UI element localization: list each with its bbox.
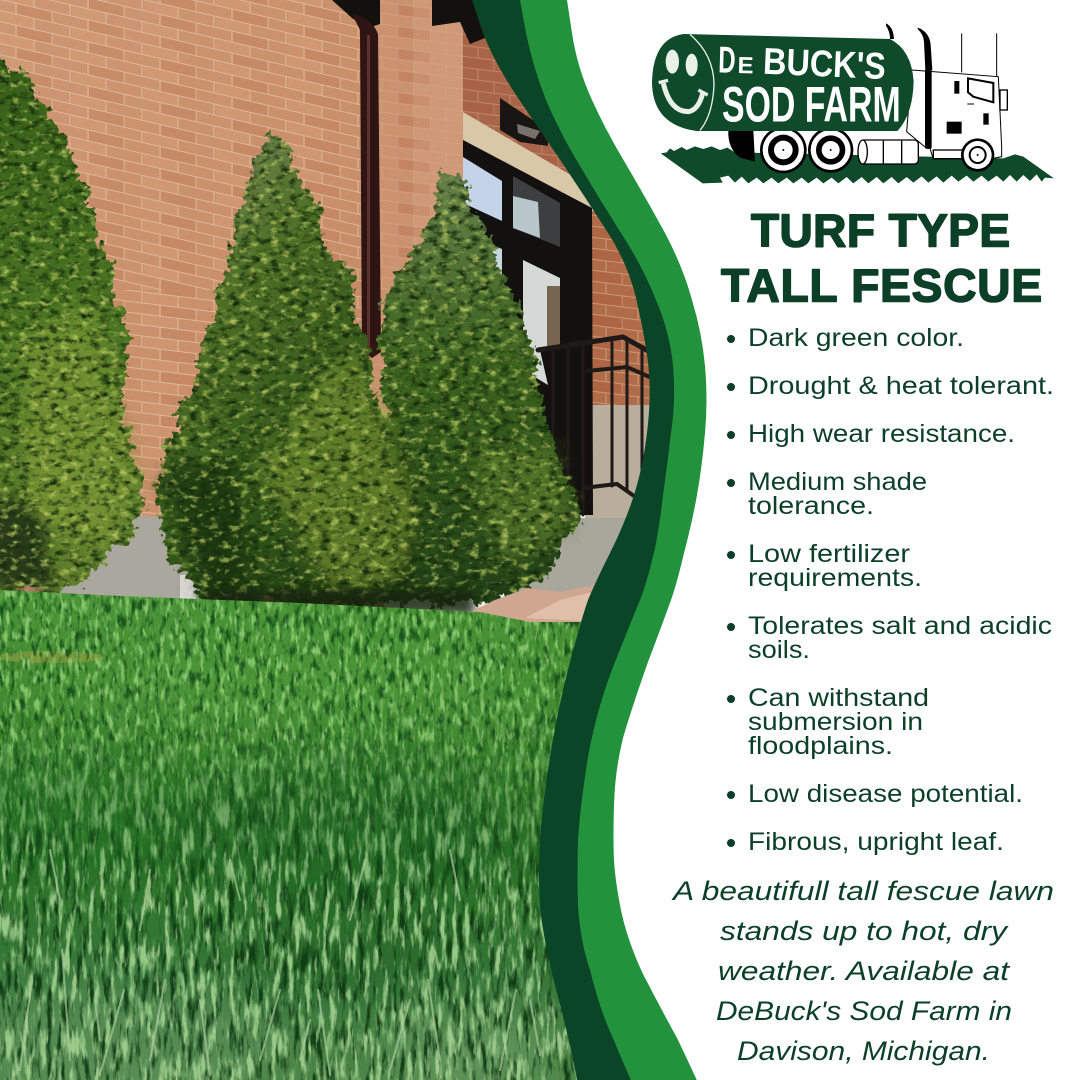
- logo wordmark: [718, 38, 901, 133]
- bullet list of fescue traits: soils.: [748, 636, 810, 664]
- bullet list of fescue traits: floodplains.: [748, 732, 893, 760]
- closing italic paragraph: DeBuck's Sod Farm in: [716, 996, 1012, 1026]
- wall lamp: [500, 98, 548, 146]
- closing italic paragraph: Davison, Michigan.: [737, 1036, 990, 1066]
- bullet list of fescue traits: Medium shade: [748, 468, 927, 496]
- upper dark brick wall: [463, 20, 583, 210]
- lawn: [0, 585, 620, 1080]
- stone band: [463, 112, 600, 215]
- bullet markers: [727, 335, 735, 847]
- brick pillar: [372, 0, 463, 460]
- logo grass: [661, 146, 1054, 183]
- ground shadow under trees: [205, 590, 475, 616]
- bullet list of fescue traits: Tolerates salt and acidic: [748, 612, 1052, 640]
- bullet list of fescue traits: requirements.: [748, 564, 922, 592]
- rock: [470, 584, 600, 625]
- heading: [721, 204, 1042, 312]
- railing: [538, 337, 652, 515]
- bullet list of fescue traits: Low disease potential.: [748, 780, 1023, 808]
- wave band: dark green: [472, 0, 1080, 1080]
- closing italic paragraph: weather. Available at: [718, 956, 1011, 986]
- heading: TURF TYPE: [751, 204, 1010, 256]
- bullet list of fescue traits: [727, 324, 1054, 856]
- wave band: bright green: [520, 0, 1080, 1080]
- tree: left: [0, 52, 146, 592]
- bullet list of fescue traits: tolerance.: [748, 492, 874, 520]
- window panes: [463, 157, 560, 385]
- window frame: [463, 140, 593, 515]
- bullet list of fescue traits: submersion in: [748, 708, 923, 736]
- heading: TALL FESCUE: [721, 260, 1042, 312]
- bullet list of fescue traits: High wear resistance.: [748, 420, 1015, 448]
- photo: building, trees and lawn: [0, 0, 660, 1080]
- concrete foundation: [50, 515, 640, 600]
- logo wheels: [760, 127, 994, 173]
- downspout: [352, 14, 381, 358]
- bullet list of fescue traits: Can withstand: [748, 684, 929, 712]
- bullet list of fescue traits: Low fertilizer: [748, 540, 910, 568]
- logo wordmark: BUCK'S: [762, 40, 887, 87]
- closing italic paragraph: A beautifull tall fescue lawn: [671, 876, 1054, 906]
- logo wordmark: SOD FARM: [722, 77, 901, 133]
- logo: DeBuck's Sod Farm truck: [652, 23, 1054, 183]
- right brick wall: [585, 200, 660, 530]
- tree: right: [382, 170, 578, 608]
- logo wordmark: E: [737, 52, 754, 78]
- closing italic paragraph: [671, 876, 1054, 1066]
- white content panel: [567, 0, 1080, 1080]
- bullet list of fescue traits: Dark green color.: [748, 324, 964, 352]
- brick wall: [0, 0, 384, 610]
- bullet list of fescue traits: Drought & heat tolerant.: [748, 372, 1054, 400]
- logo smiley face: [659, 34, 714, 130]
- closing italic paragraph: stands up to hot, dry: [720, 916, 1009, 946]
- logo sod roll: [652, 34, 914, 131]
- tree: center: [158, 128, 420, 604]
- roof eave: [332, 0, 490, 44]
- logo truck chassis: [728, 23, 1007, 164]
- bullet list of fescue traits: Fibrous, upright leaf.: [748, 828, 1004, 856]
- logo wordmark: D: [718, 38, 736, 81]
